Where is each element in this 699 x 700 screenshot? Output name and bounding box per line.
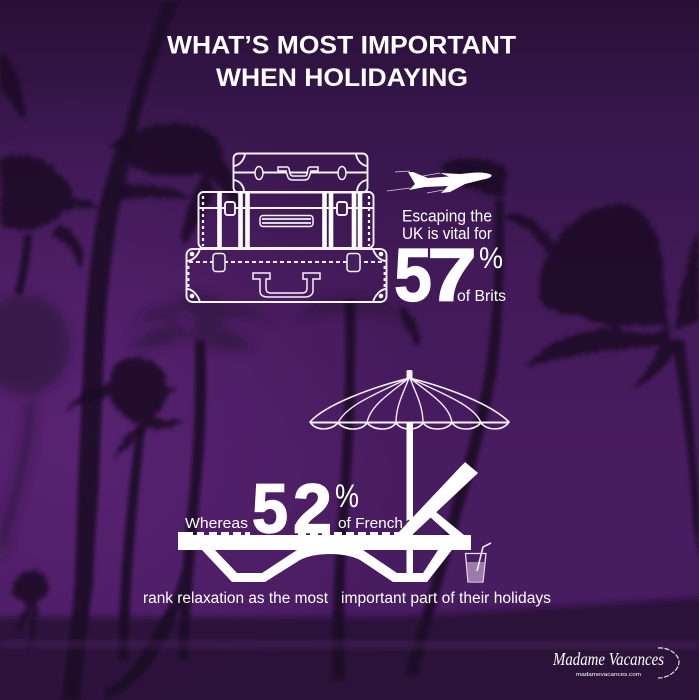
icon: stacked suitcases xyxy=(186,154,386,302)
text: French statistic: 2 xyxy=(293,470,332,548)
text: French statistic: important part of their holidays xyxy=(341,590,551,607)
icon: bottom suitcase xyxy=(186,249,386,302)
logo: Madame Vacances: madamevacances.com xyxy=(576,672,641,678)
icon: drink glass xyxy=(466,543,491,582)
palm trunk: behind parasol xyxy=(332,300,355,680)
crown: beside tall trunk xyxy=(108,123,240,248)
text: UK statistic: Escaping the xyxy=(402,208,492,226)
crown: small shoreline palm xyxy=(12,570,48,652)
palm trunk: tall left xyxy=(62,0,178,700)
beach and sea xyxy=(0,597,699,700)
text: UK statistic xyxy=(394,208,506,317)
text: UK statistic: UK is vital for xyxy=(402,225,492,243)
text: French statistic xyxy=(143,470,551,607)
hazy distant palms xyxy=(0,294,408,560)
title: WHEN HOLIDAYING xyxy=(216,64,468,92)
text: French statistic: 5 xyxy=(252,470,288,548)
text: UK statistic: of Brits xyxy=(457,288,506,305)
palm trunk: centre left xyxy=(118,425,145,660)
icon: sun lounger xyxy=(178,460,478,582)
text: French statistic: rank relaxation as the most xyxy=(143,590,329,607)
text: French statistic: % xyxy=(335,478,359,514)
icon: top suitcase xyxy=(233,154,368,192)
logo: Madame Vacances xyxy=(552,648,679,678)
title xyxy=(167,32,516,92)
crown: behind plane xyxy=(400,158,507,350)
text: French statistic: Whereas xyxy=(185,515,248,532)
palm trunk: double centre xyxy=(178,340,206,660)
palm trunk: upper left xyxy=(15,235,32,295)
crown: upper left xyxy=(0,53,100,268)
icon: middle suitcase xyxy=(198,192,374,248)
text: French statistic: of French xyxy=(338,515,403,532)
crown: centre left xyxy=(63,357,187,458)
logo: Madame Vacances: Madame Vacances xyxy=(552,649,664,669)
palm trunk: far right xyxy=(672,340,699,560)
text: UK statistic: 7 xyxy=(427,233,477,317)
title: WHAT’S MOST IMPORTANT xyxy=(167,32,516,60)
icon: airplane xyxy=(387,171,492,193)
text: UK statistic: 5 xyxy=(394,233,432,317)
palm trunk: right of centre xyxy=(405,200,504,675)
palm trunk: leaning xyxy=(105,540,196,698)
icon: parasol xyxy=(310,370,509,576)
text: UK statistic: % xyxy=(479,242,503,275)
crown: large right palm xyxy=(500,204,699,388)
